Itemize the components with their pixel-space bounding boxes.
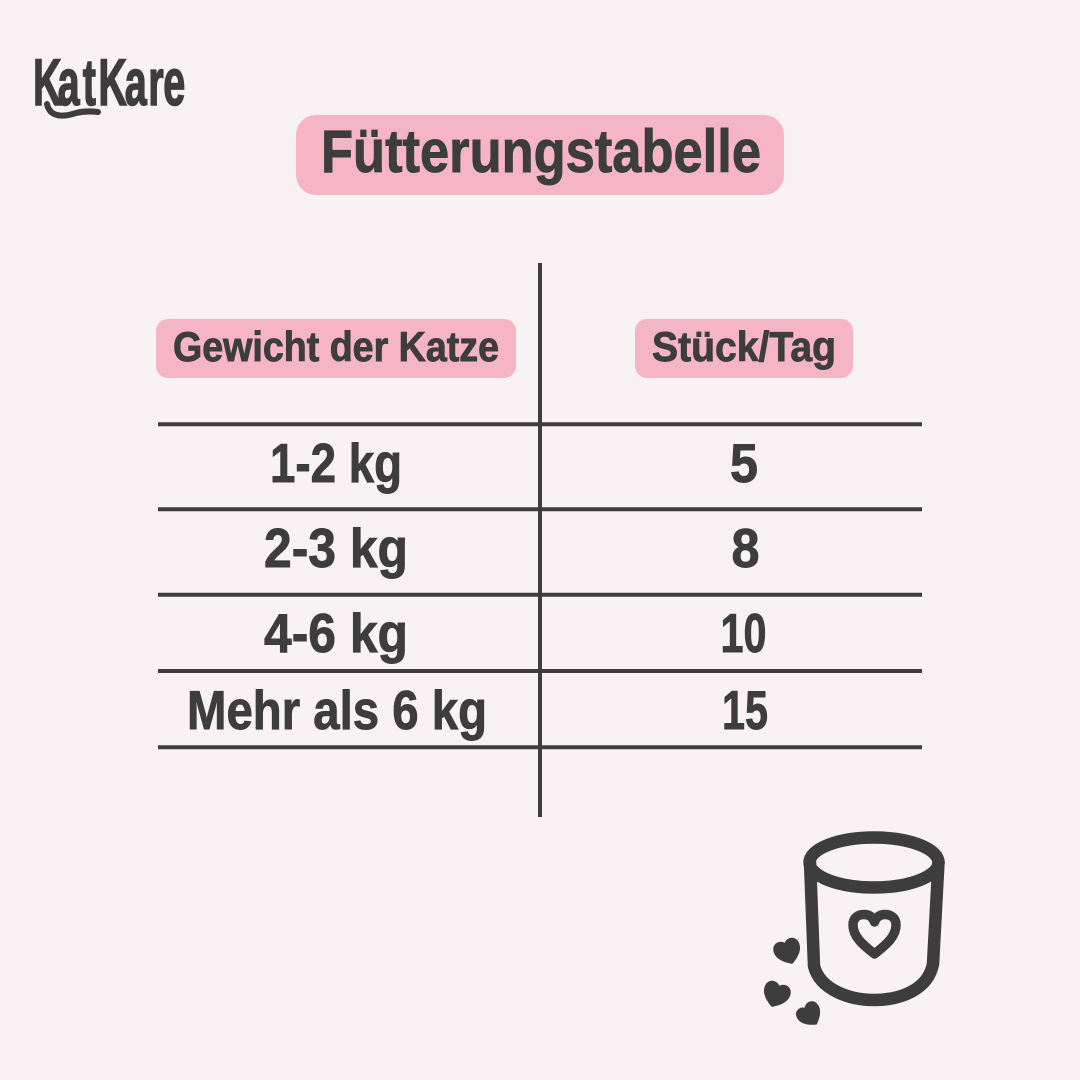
row: more than 6 kg: Mehr als 6 kg bbox=[187, 679, 487, 741]
icon: can with hearts bbox=[761, 838, 938, 1030]
small heart 3 bbox=[795, 1000, 825, 1030]
header: weight column: Gewicht der Katze bbox=[173, 323, 499, 370]
header: pieces per day column: Stück/Tag bbox=[652, 323, 836, 370]
logo: KatKare: KatKare bbox=[33, 46, 185, 120]
feeding table bbox=[156, 263, 922, 817]
can lid bbox=[810, 838, 938, 888]
can body bbox=[810, 862, 938, 1000]
title: Fütterungstabelle bbox=[321, 118, 761, 185]
row: 2-3 kg: 2-3 kg bbox=[264, 517, 408, 579]
heart on can bbox=[853, 914, 896, 954]
row: more than 6 kg bbox=[187, 679, 768, 741]
small heart 1 bbox=[773, 938, 803, 966]
row: 2-3 kg: 8 bbox=[732, 517, 760, 579]
row: 2-3 kg bbox=[264, 517, 760, 579]
small heart 2 bbox=[761, 981, 791, 1009]
row: 4-6 kg bbox=[264, 602, 766, 664]
row: 1-2 kg bbox=[270, 432, 758, 494]
row: more than 6 kg: 15 bbox=[722, 679, 768, 741]
row: 1-2 kg: 1-2 kg bbox=[270, 432, 402, 494]
row: 1-2 kg: 5 bbox=[730, 432, 758, 494]
row: 4-6 kg: 4-6 kg bbox=[264, 602, 408, 664]
row: 4-6 kg: 10 bbox=[720, 602, 766, 664]
